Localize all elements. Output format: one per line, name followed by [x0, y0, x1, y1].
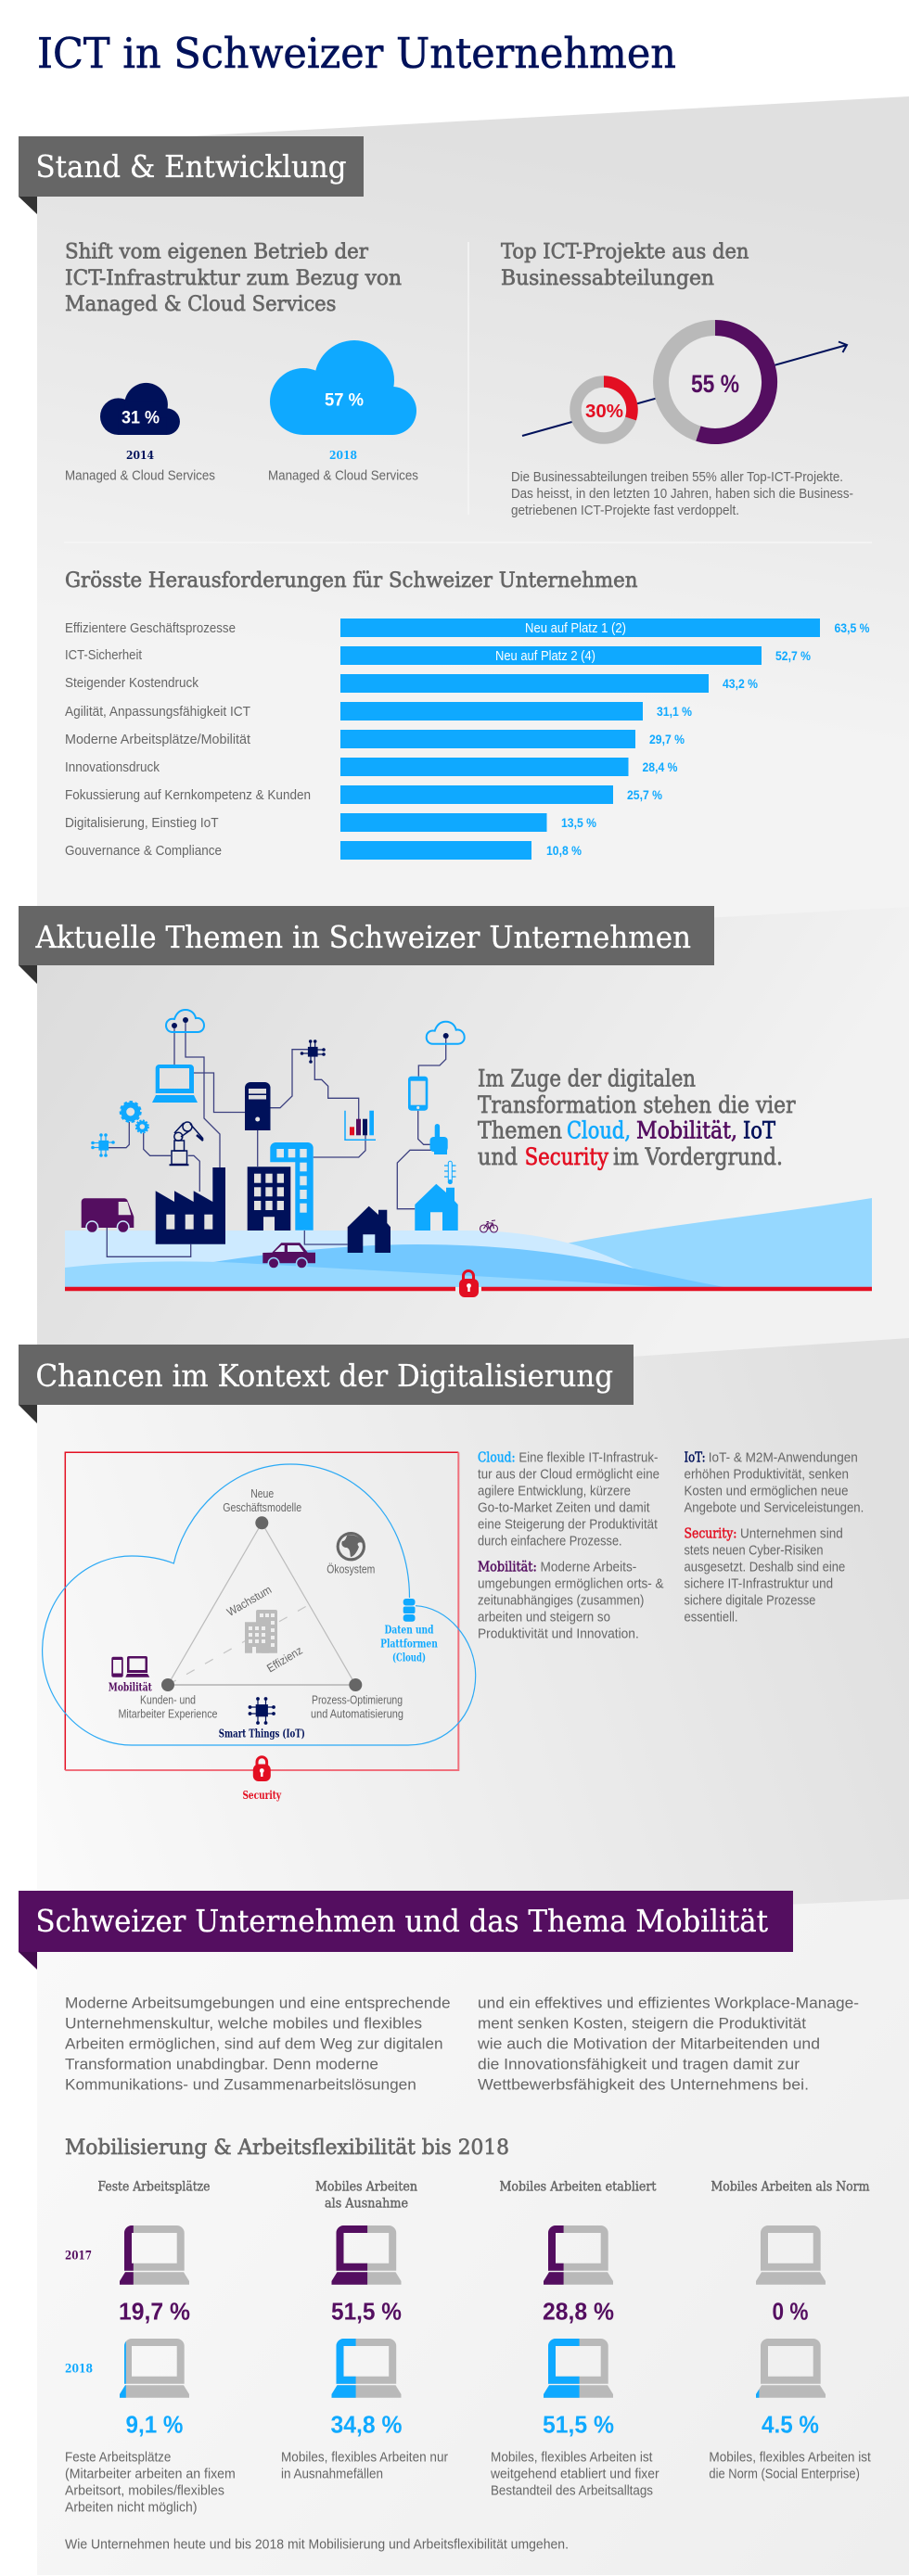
text: Security: sichere digitale Prozesse	[685, 1593, 815, 1608]
text: Zuge der digitalen Transformation: und	[478, 1143, 518, 1170]
arrow	[522, 341, 847, 436]
column headings: Feste Arbeitsplätze	[98, 2180, 210, 2195]
row 2: 52,7 %	[775, 648, 811, 663]
text: intro left: Moderne Arbeitsumgebungen und eine entsprechende	[65, 1995, 451, 2012]
row 5: Moderne Arbeitsplätze/Mobilität	[65, 733, 250, 747]
donut 55 %	[660, 327, 770, 436]
row 7: 25,7 %	[627, 787, 662, 802]
icon: bicycle	[480, 1220, 497, 1232]
description col 3: Bestandteil des Arbeitsalltags	[491, 2483, 653, 2498]
text: Security: ausgesetzt. Deshalb sind eine	[685, 1560, 845, 1575]
row 8: 13,5 %	[561, 815, 596, 830]
description col 3	[490, 2450, 659, 2498]
text: Zuge der digitalen Transformation: IoT	[743, 1117, 775, 1144]
column headings: Mobiles Arbeiten	[315, 2180, 417, 2195]
donut 30 %: 30%	[585, 402, 623, 422]
text: Cloud: durch einfachere Prozesse.	[478, 1535, 622, 1549]
column headings	[98, 2180, 870, 2212]
section ribbon: Stand & Entwicklung	[19, 136, 364, 214]
row 3: 43,2 %	[723, 676, 758, 691]
section ribbon: Mobilität: Schweizer Unternehmen und das Thema Mobilität	[35, 1903, 768, 1939]
values 2018: 34,8 %	[330, 2410, 403, 2438]
icon: laptop 2018 col 2	[332, 2339, 401, 2398]
icon: hand	[430, 1124, 448, 1154]
icon: chip blue	[92, 1134, 114, 1156]
text: Zuge der digitalen Transformation: Themen	[478, 1117, 562, 1144]
text: Security: sichere IT-Infrastruktur und	[685, 1576, 833, 1591]
icon: blue building	[270, 1142, 314, 1231]
icon: cloud 2018	[270, 340, 416, 435]
description col 1: Arbeitsort, mobiles/flexibles	[65, 2483, 224, 2498]
icon: cloud 2014	[100, 383, 180, 435]
description col 3: Mobiles, flexibles Arbeiten ist	[491, 2450, 652, 2465]
icon: lock security	[253, 1757, 271, 1781]
icon: chip IoT	[249, 1698, 275, 1724]
description col 2: in Ausnahmefällen	[281, 2467, 383, 2481]
label: Kunden- und Mitarbeiter Experience: Mitarbeiter Experience	[119, 1708, 218, 1721]
row 3: Steigender Kostendruck	[65, 676, 199, 691]
text: intro right: die Innovationsfähigkeit und tragen damit zur	[478, 2056, 800, 2073]
label: Neue Geschäftsmodelle: Neue	[250, 1487, 274, 1500]
description col 4	[709, 2450, 871, 2481]
label: Daten und Plattformen (Cloud): Daten und	[384, 1624, 434, 1637]
text: Security: Unternehmen sind	[740, 1526, 843, 1541]
text: Mobilität: Produktivität und Innovation.	[478, 1626, 639, 1641]
label: Kunden- und Mitarbeiter Experience	[119, 1694, 218, 1721]
section ribbon: Mobilität	[19, 1891, 793, 1970]
heading: Top ICT-Projekte: Businessabteilungen	[501, 267, 714, 290]
description col 2	[281, 2450, 448, 2481]
icon: lock	[459, 1270, 479, 1297]
text: Mobilität: Mobilität:	[478, 1560, 537, 1575]
text: intro right	[477, 1995, 859, 2094]
text: IoT: Angebote und Serviceleistungen.	[685, 1501, 864, 1516]
text: Zuge der digitalen Transformation: Im Zuge der digitalen	[478, 1065, 696, 1092]
cloud 2014 value: 31 %	[122, 408, 160, 428]
row 1: Effizientere Geschäftsprozesse	[65, 621, 236, 636]
icon: laptop 2018 col 1	[120, 2339, 189, 2398]
label: Ökosystem: Ökosystem	[326, 1563, 375, 1576]
label: Smart Things: Smart Things (IoT)	[219, 1727, 305, 1740]
text: Mobilität	[478, 1560, 664, 1641]
text: Mobilität: umgebungen ermöglichen orts- &	[478, 1576, 664, 1591]
label: Prozess-Optimierung: und Automatisierung	[311, 1708, 403, 1721]
icon: van	[82, 1198, 134, 1233]
label: Security: Security	[242, 1789, 282, 1802]
text: intro right: Wettbewerbsfähigkeit des Unternehmens bei.	[478, 2076, 809, 2094]
caption 2014: Managed & Cloud Services	[65, 469, 215, 484]
label: Daten und Plattformen (Cloud): (Cloud)	[392, 1651, 426, 1664]
row 2: ICT-Sicherheit	[65, 648, 142, 663]
section ribbon: Stand & Entwicklung: Stand & Entwicklung	[35, 148, 347, 185]
heading: Mobilisierung: Mobilisierung & Arbeitsflexibilität bis 2018	[65, 2136, 509, 2160]
icon: blue house	[415, 1184, 458, 1231]
icon: chart	[345, 1111, 376, 1140]
text: Cloud: Eine flexible IT-Infrastruk-	[519, 1451, 659, 1466]
text: Zuge der digitalen Transformation: Mobilität,	[636, 1117, 737, 1144]
row 2	[65, 646, 811, 665]
label: Prozess-Optimierung: Prozess-Optimierung	[312, 1694, 403, 1707]
text: IoT: Kosten und ermöglichen neue	[685, 1485, 848, 1499]
donut 55 %: 55 %	[691, 370, 739, 398]
triangle	[161, 1516, 362, 1691]
icon: factory	[156, 1167, 225, 1244]
icon: laptop 2017 col 1	[120, 2225, 189, 2285]
caption 2018: Managed & Cloud Services	[268, 469, 418, 484]
text: Zuge der digitalen Transformation: im Vordergrund.	[613, 1143, 783, 1170]
icon: cloud left	[166, 1010, 204, 1032]
label: Daten und Plattformen (Cloud): Plattformen	[380, 1638, 438, 1651]
label: Mobilität: Mobilität	[109, 1680, 152, 1693]
icon: laptop	[152, 1065, 198, 1103]
background panel: Aktuelle Themen	[37, 907, 909, 1397]
text: intro left	[65, 1995, 451, 2094]
icon: laptop 2018 col 4	[756, 2339, 826, 2398]
background panel: Mobilität	[37, 1899, 909, 2575]
column headings: Mobiles Arbeiten als Norm	[711, 2180, 870, 2195]
text: Cloud: Cloud:	[478, 1451, 516, 1466]
section ribbon: Chancen	[19, 1345, 634, 1423]
footnote: Wie Unternehmen heute und bis 2018 mit Mobilisierung und Arbeitsflexibilität umgehen.	[65, 2537, 569, 2552]
text: intro left: Unternehmenskultur, welche mobiles und flexibles	[65, 2015, 422, 2033]
donut 30 %	[575, 382, 633, 438]
background panel: Stand & Entwicklung	[37, 96, 909, 964]
text: intro left: Transformation unabdingbar. Denn moderne	[65, 2056, 378, 2073]
row 9: Gouvernance & Compliance	[65, 844, 222, 859]
row 2: Neu auf Platz 2 (4)	[495, 649, 595, 664]
title: ICT in Schweizer Unternehmen	[37, 29, 676, 78]
text: intro right: ment senken Kosten, steigern die Produktivität	[478, 2015, 806, 2033]
icon: thermometer	[444, 1161, 456, 1184]
caption 2014	[65, 449, 215, 484]
text: intro left: Arbeiten ermöglichen, sind auf dem Weg zur digitalen	[65, 2035, 443, 2053]
icon: laptop 2018 col 3	[544, 2339, 613, 2398]
column headings: Mobiles Arbeiten etabliert	[499, 2180, 657, 2195]
row 6: 28,4 %	[642, 759, 678, 774]
text: donut description: getriebenen ICT-Projekte fast verdoppelt.	[511, 504, 739, 518]
text: Security	[685, 1526, 845, 1625]
values 2018: 51,5 %	[543, 2410, 614, 2438]
row 5: 29,7 %	[649, 732, 685, 746]
row 9: 10,8 %	[546, 843, 582, 858]
icon: navy house	[348, 1206, 390, 1253]
cloud outline	[43, 1464, 476, 1745]
text: intro left: Kommunikations- und Zusammenarbeitslösungen	[65, 2076, 416, 2094]
text: Cloud: tur aus der Cloud ermöglicht eine	[478, 1468, 659, 1483]
row 5	[65, 730, 685, 748]
heading: Shift: Managed & Cloud Services	[65, 293, 336, 316]
values 2017: 28,8 %	[543, 2298, 614, 2326]
description col 3: weitgehend etabliert und fixer	[490, 2467, 659, 2481]
icon: gray building	[245, 1610, 277, 1653]
description col 1	[65, 2450, 236, 2515]
section ribbon: Aktuelle Themen	[19, 906, 714, 984]
heading: Top ICT-Projekte	[501, 241, 749, 290]
row 3	[65, 674, 758, 693]
icon: laptop 2017 col 4	[756, 2225, 826, 2285]
text: donut description: Das heisst, in den letzten 10 Jahren, haben sich die Business-	[511, 487, 853, 502]
label: Effizienz: Effizienz	[264, 1644, 305, 1675]
label: Wachstum: Wachstum	[224, 1583, 274, 1619]
text: Zuge der digitalen Transformation: Cloud,	[567, 1117, 631, 1144]
row 7: Fokussierung auf Kernkompetenz & Kunden	[65, 788, 311, 803]
label: Neue Geschäftsmodelle	[223, 1487, 301, 1514]
heading: Shift: Shift vom eigenen Betrieb der	[65, 241, 368, 264]
row 8: Digitalisierung, Einstieg IoT	[65, 816, 219, 831]
icon: cloud right	[427, 1022, 465, 1044]
values 2018	[126, 2410, 819, 2438]
caption 2018	[268, 449, 418, 484]
icon: database	[403, 1599, 416, 1622]
row 8	[65, 813, 596, 832]
text: Cloud	[478, 1451, 659, 1549]
icon: globe	[337, 1532, 365, 1561]
text: Zuge der digitalen Transformation: Transformation stehen die vier	[478, 1091, 796, 1118]
heading: Top ICT-Projekte: Top ICT-Projekte aus den	[501, 241, 749, 264]
text: Cloud: eine Steigerung der Produktivität	[478, 1518, 658, 1533]
section ribbon: Aktuelle Themen: Aktuelle Themen in Schweizer Unternehmen	[35, 919, 691, 955]
caption 2014: 2014	[126, 449, 154, 462]
heading: Shift: ICT-Infrastruktur zum Bezug von	[65, 267, 402, 290]
text: Cloud: Go-to-Market Zeiten und damit	[478, 1501, 650, 1516]
row 4: 31,1 %	[657, 704, 692, 719]
year label 2018: 2018	[65, 2363, 93, 2377]
icon: laptop 2017 col 3	[544, 2225, 613, 2285]
heading: Grösste Herausforderungen: Grösste Herausforderungen für Schweizer Unternehmen	[65, 569, 638, 593]
text: Cloud: agilere Entwicklung, kürzere	[478, 1485, 631, 1499]
icon: navy building	[248, 1167, 290, 1231]
icon: gears	[121, 1102, 148, 1133]
caption 2018: 2018	[329, 449, 357, 462]
values 2018: 9,1 %	[126, 2410, 184, 2438]
description col 1: (Mitarbeiter arbeiten an fixem	[65, 2467, 236, 2481]
text: Security: Security:	[685, 1526, 736, 1541]
cloud 2018 value: 57 %	[325, 391, 364, 410]
year label 2017: 2017	[65, 2250, 92, 2264]
icon: chip navy	[301, 1040, 325, 1063]
text: IoT	[685, 1451, 864, 1516]
illustration: connected city	[65, 1010, 872, 1297]
text: Zuge der digitalen Transformation: Security	[525, 1143, 609, 1170]
description col 1: Arbeiten nicht möglich)	[65, 2500, 197, 2515]
text: intro right: wie auch die Motivation der Mitarbeitenden und	[477, 2035, 820, 2053]
description col 4: Mobiles, flexibles Arbeiten ist	[709, 2450, 871, 2465]
icon: server	[245, 1082, 271, 1130]
text: donut description: Die Businessabteilungen treiben 55% aller Top-ICT-Projekte.	[511, 470, 843, 485]
text: Zuge der digitalen Transformation	[478, 1065, 796, 1170]
row 4	[65, 702, 692, 721]
label: Neue Geschäftsmodelle: Geschäftsmodelle	[223, 1501, 301, 1514]
diagram: cloud and triangle	[43, 1452, 476, 1802]
bar chart: Herausforderungen	[65, 618, 870, 860]
icon: mobile devices	[111, 1656, 149, 1677]
text: Mobilität: Moderne Arbeits-	[540, 1560, 636, 1575]
text: Mobilität: arbeiten und steigern so	[478, 1610, 610, 1625]
text: Security: essentiell.	[685, 1610, 738, 1625]
heading: Shift	[65, 241, 402, 316]
row 7	[65, 785, 662, 804]
label: Daten und Plattformen (Cloud)	[380, 1624, 438, 1664]
text: donut description	[511, 470, 853, 518]
text: intro right: und ein effektives und effizientes Workplace-Manage-	[478, 1995, 859, 2012]
row 6	[65, 758, 678, 776]
values 2018: 4.5 %	[762, 2410, 819, 2438]
column headings: als Ausnahme	[325, 2197, 408, 2212]
icon: car	[262, 1243, 315, 1269]
text: Mobilität: zeitunabhängiges (zusammen)	[478, 1593, 644, 1608]
section ribbon: Chancen: Chancen im Kontext der Digitalisierung	[35, 1358, 613, 1394]
background panel: Chancen	[37, 1338, 909, 1939]
values 2017	[119, 2298, 809, 2326]
row 1	[65, 618, 870, 637]
description col 4: die Norm (Social Enterprise)	[709, 2467, 860, 2481]
connector lines	[107, 1020, 446, 1256]
row 1: Neu auf Platz 1 (2)	[525, 621, 626, 636]
label: Prozess-Optimierung	[311, 1694, 403, 1721]
row 4: Agilität, Anpassungsfähigkeit ICT	[65, 705, 250, 720]
security frame	[65, 1452, 458, 1770]
icon: laptop 2017 col 2	[332, 2225, 401, 2285]
landscape	[65, 1198, 872, 1287]
row 1: 63,5 %	[835, 620, 870, 635]
text: IoT: IoT:	[685, 1451, 706, 1466]
icon: phone	[408, 1077, 428, 1111]
text: Security: stets neuen Cyber-Risiken	[685, 1543, 824, 1558]
values 2017: 19,7 %	[119, 2298, 190, 2326]
icon: robot arm	[169, 1122, 203, 1165]
red line	[65, 1287, 872, 1291]
row 6: Innovationsdruck	[65, 760, 160, 775]
description col 1: Feste Arbeitsplätze	[65, 2450, 171, 2465]
chart: donuts with growth arrow	[522, 327, 847, 438]
values 2017: 51,5 %	[331, 2298, 402, 2326]
text: IoT: erhöhen Produktivität, senken	[685, 1468, 849, 1483]
label: Kunden- und Mitarbeiter Experience: Kunden- und	[140, 1694, 196, 1707]
values 2017: 0 %	[772, 2298, 809, 2326]
description col 2: Mobiles, flexibles Arbeiten nur	[281, 2450, 448, 2465]
text: IoT: IoT- & M2M-Anwendungen	[709, 1451, 858, 1466]
row 9	[65, 841, 582, 860]
